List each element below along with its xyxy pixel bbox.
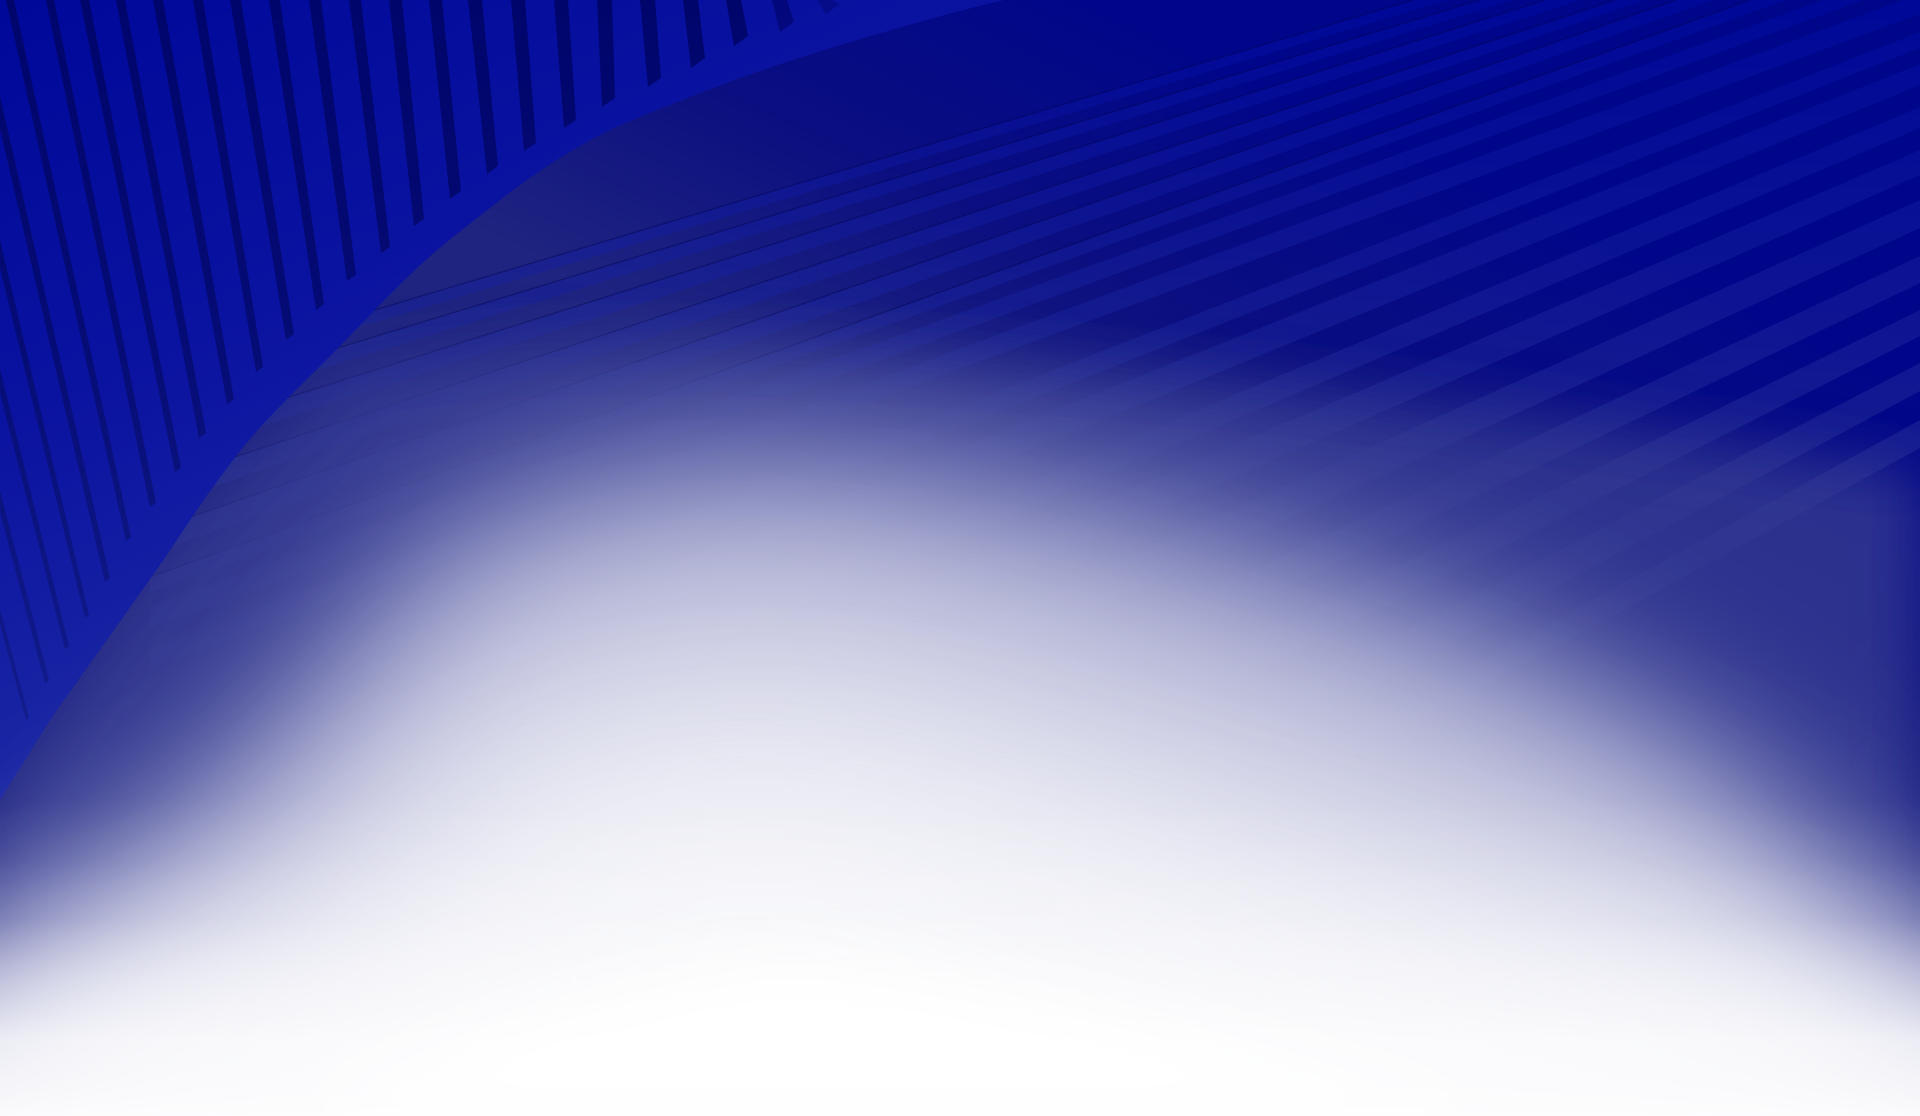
- near-vertical dark stripes: [0, 0, 840, 720]
- soft white glow layers: [0, 455, 1920, 1116]
